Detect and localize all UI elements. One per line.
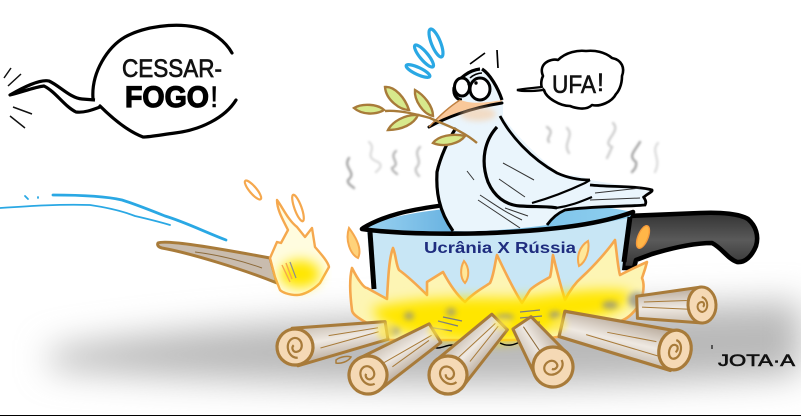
smoke squiggles bbox=[347, 123, 658, 188]
ash smudges bbox=[384, 292, 646, 335]
signature: JOTA·A bbox=[718, 351, 796, 370]
speech bubble: ufa: ! bbox=[597, 69, 604, 97]
speech bubble: cessar-fogo: ! bbox=[210, 81, 218, 114]
pot handle bbox=[623, 213, 757, 268]
log: left bbox=[274, 314, 390, 369]
flame drops bbox=[348, 228, 360, 258]
flying sparks bbox=[243, 179, 263, 201]
bubble text: CESSAR- bbox=[122, 55, 222, 83]
speech bubble: ufa bbox=[517, 51, 623, 109]
eyes bbox=[454, 78, 470, 96]
log: back right bbox=[636, 287, 717, 325]
campfire flames bbox=[348, 228, 647, 348]
water jet bbox=[0, 195, 226, 240]
beak bbox=[429, 100, 503, 127]
olive branch bbox=[354, 87, 477, 145]
log: front centre bbox=[421, 309, 514, 402]
ground shadow bbox=[50, 302, 801, 385]
log: right bbox=[557, 304, 695, 374]
match flame bbox=[270, 200, 329, 295]
pot body bbox=[367, 218, 628, 300]
pot bbox=[362, 203, 633, 300]
burning stick bbox=[158, 179, 329, 295]
bubble text: UFA bbox=[552, 71, 596, 99]
bottom border bbox=[0, 415, 801, 416]
signature bbox=[712, 345, 796, 370]
eyebrows bbox=[470, 50, 498, 68]
speech bubble: cessar-fogo bbox=[4, 25, 236, 137]
dove bbox=[429, 50, 652, 231]
flame smears over log tips bbox=[377, 316, 567, 341]
sweat drops bbox=[405, 27, 446, 80]
wing bbox=[484, 127, 557, 208]
speech bubble: cessar-fogo: FOGO bbox=[125, 81, 209, 114]
pot interior bbox=[364, 203, 633, 234]
leaves bbox=[354, 105, 384, 114]
log: front left bbox=[342, 317, 445, 401]
dove body bbox=[430, 69, 652, 231]
log: front centre right bbox=[506, 311, 581, 395]
logs bbox=[274, 287, 717, 402]
pot label: Ucrânia X Rússia bbox=[424, 240, 576, 257]
flame core bbox=[372, 290, 630, 342]
